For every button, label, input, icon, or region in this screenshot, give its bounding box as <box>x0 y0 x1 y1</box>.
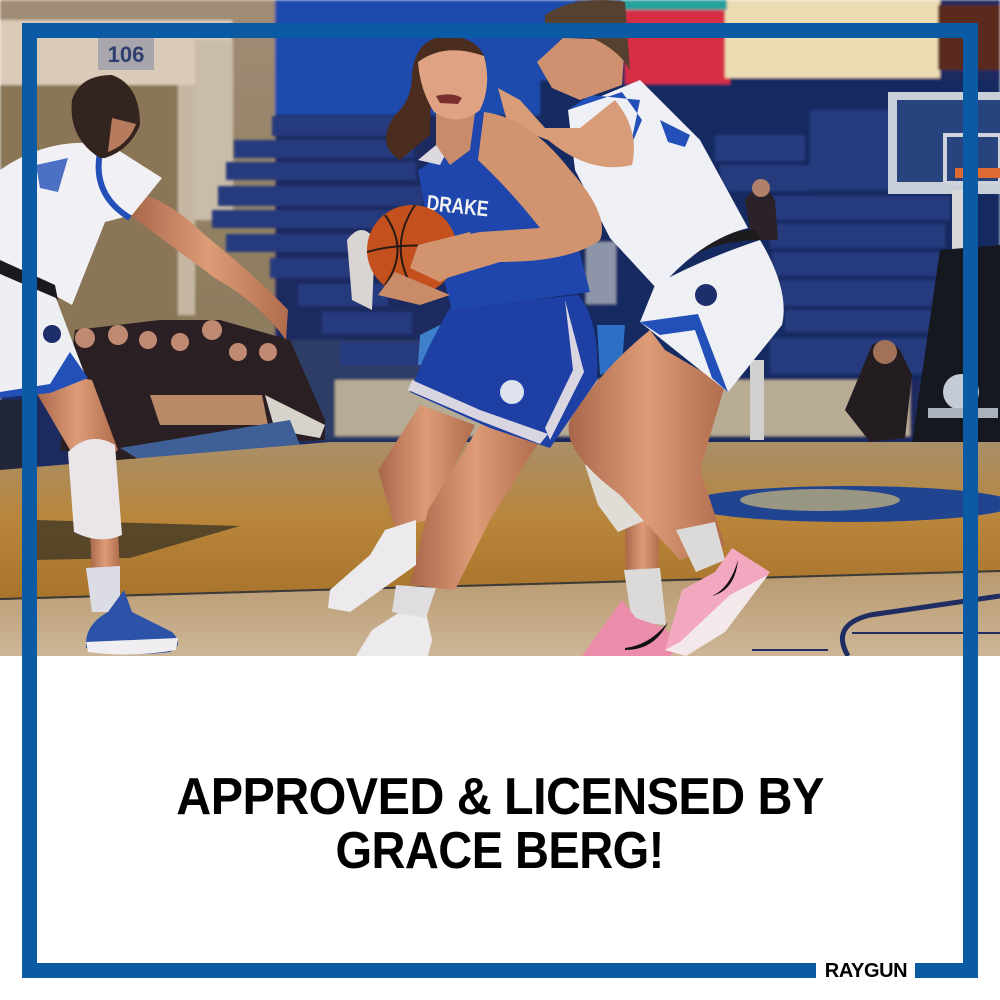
headline text: APPROVED & LICENSED BY <box>176 768 824 826</box>
headline text <box>176 768 824 880</box>
section 106 sign <box>98 38 154 70</box>
headline text: GRACE BERG! <box>336 822 664 880</box>
hardwood court <box>0 360 1000 656</box>
center player in blue with basketball: DRAKE <box>425 190 490 221</box>
arena background <box>0 0 1000 656</box>
brand gap in frame <box>816 958 914 984</box>
player left in white <box>0 75 288 655</box>
photo: basketball game scene <box>0 0 1000 656</box>
brand label: RAYGUN <box>825 960 907 982</box>
center player in blue with basketball <box>328 36 602 656</box>
bleacher seats <box>212 110 950 374</box>
section 106 sign: 106 <box>108 42 144 67</box>
spectators <box>0 179 912 475</box>
basketball hoop <box>888 92 1000 443</box>
player right in white <box>498 0 784 656</box>
